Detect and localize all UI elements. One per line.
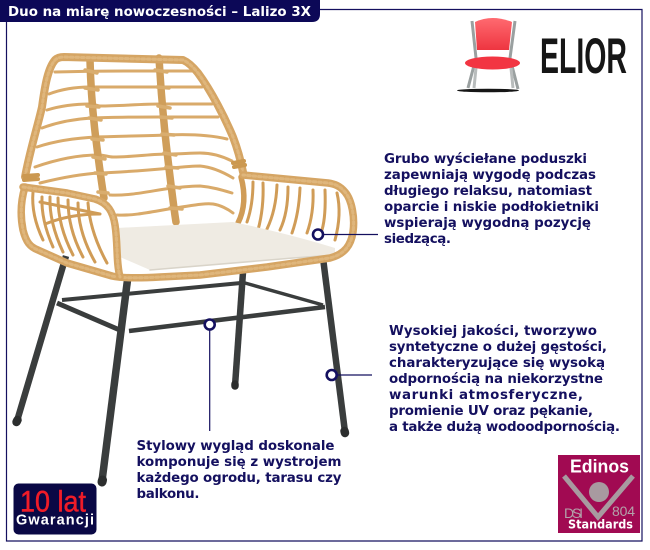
text block: style: balkonu. — [136, 487, 200, 502]
badge: 10 year warranty — [14, 484, 96, 534]
text block: cushion comfort: długiego relaksu, natomiast — [384, 184, 593, 199]
text block: material durability — [389, 323, 620, 435]
text block: material durability: syntetyczne o dużej gęstości, — [389, 339, 607, 355]
callout: cushion marker — [313, 230, 378, 240]
text block: material durability: charakteryzujące się wysoką — [389, 356, 605, 371]
badge: 10 year warranty: 10 lat — [20, 486, 87, 518]
text block: cushion comfort: wspierają wygodną pozycję — [384, 216, 591, 231]
chair legs and crossbars — [16, 256, 345, 482]
callout: frame marker — [205, 320, 215, 431]
text block: style: Stylowy wygląd doskonale — [136, 439, 334, 454]
text block: material durability: warunki atmosferyczne, — [389, 388, 583, 403]
text block: material durability: a także dużą wodoodpornością. — [389, 419, 620, 435]
text block: style: każdego ogrodu, tarasu czy — [136, 471, 342, 486]
back spines with knots — [85, 58, 182, 222]
back horizontal slats — [35, 71, 233, 215]
text block: material durability: promienie UV oraz pękanie, — [389, 404, 593, 419]
badge: Edinos DSI 804 standards: 804 — [612, 503, 635, 519]
near arm slats — [33, 192, 107, 263]
text block: style: komponuje się z wystrojem — [136, 455, 342, 470]
text block: cushion comfort: Grubo wyściełane poduszki — [384, 151, 587, 167]
arm frames — [21, 175, 354, 278]
text block: material durability: Wysokiej jakości, tworzywo — [389, 323, 597, 339]
text block: cushion comfort: siedzącą. — [384, 232, 451, 247]
seat cushion — [117, 222, 335, 270]
logo: Elior — [457, 18, 627, 92]
title: Duo na miarę nowoczesności – Lalizo 3X — [8, 4, 312, 20]
text block: cushion comfort — [384, 151, 599, 247]
text block: cushion comfort: zapewniają wygodę podczas — [384, 168, 596, 183]
text block: material durability: odpornością na niekorzystne — [389, 371, 603, 387]
back frame — [25, 57, 243, 177]
callout: leg marker — [327, 370, 372, 380]
text block: cushion comfort: oparcie i niskie podłokietniki — [384, 200, 599, 215]
badge: 10 year warranty: Gwarancji — [16, 512, 94, 528]
far arm slats — [247, 182, 339, 240]
chair illustration — [16, 57, 354, 482]
title — [0, 0, 320, 22]
icon: red chair — [457, 18, 627, 92]
badge: Edinos DSI 804 standards: Standards — [568, 516, 633, 532]
badge: Edinos DSI 804 standards — [558, 455, 640, 533]
text block: style — [136, 439, 342, 502]
badge: Edinos DSI 804 standards: Edinos — [570, 456, 629, 476]
badge: Edinos DSI 804 standards: DSI — [564, 505, 583, 521]
